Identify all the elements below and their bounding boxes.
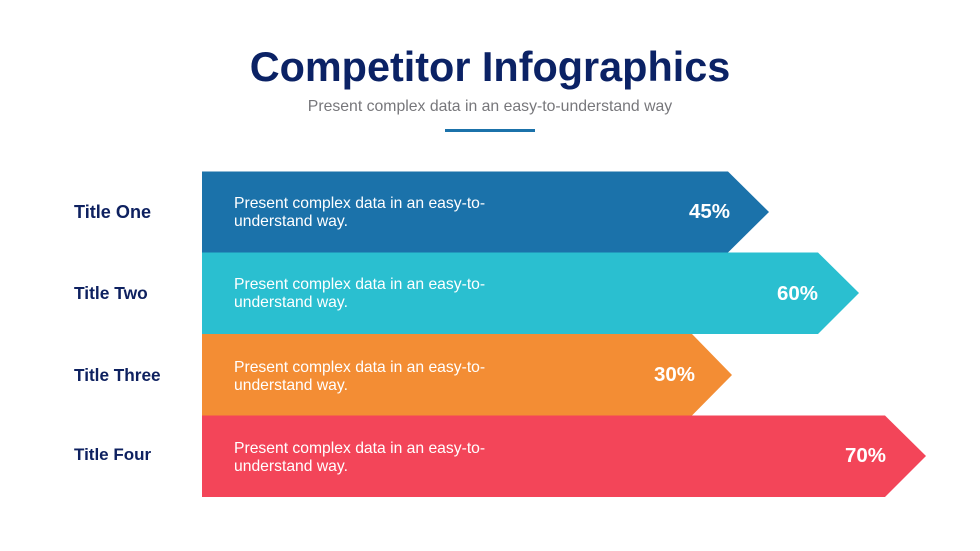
percentage: 60%: 60% [777,282,818,305]
description: row four [234,440,485,474]
percentage: 45%: 45% [689,200,730,223]
row label: Title Three: Title Three [74,365,161,385]
row label: Title One: Title One [74,202,151,222]
description: row two: Present complex data in an easy-to- [234,276,485,293]
description: row three: understand way. [234,376,348,394]
description: row three: Present complex data in an easy-to- [234,359,485,376]
description: row two: understand way. [234,294,348,310]
description: row three [234,359,485,394]
arrow bar: Title Two 60% [202,252,859,334]
row label: Title Four: Title Four [74,445,151,464]
percentage: 30%: 30% [654,363,695,386]
description: row one: Present complex data in an easy-to- [234,195,485,212]
title underline [445,129,535,132]
description: row one [234,195,485,230]
description: row one: understand way. [234,212,348,230]
arrow bar: Title Four 70% [202,416,926,497]
description: row four: understand way. [234,458,348,474]
title: Competitor Infographics [250,44,730,90]
row label: Title Two: Title Two [74,283,148,303]
percentage: 70%: 70% [845,444,886,467]
description: row four: Present complex data in an easy-to- [234,440,485,457]
description: row two [234,276,485,310]
arrow bar: Title One 45% [202,172,769,252]
subtitle: Present complex data in an easy-to-understand way [308,98,672,115]
arrow bar: Title Three 30% [202,334,732,416]
